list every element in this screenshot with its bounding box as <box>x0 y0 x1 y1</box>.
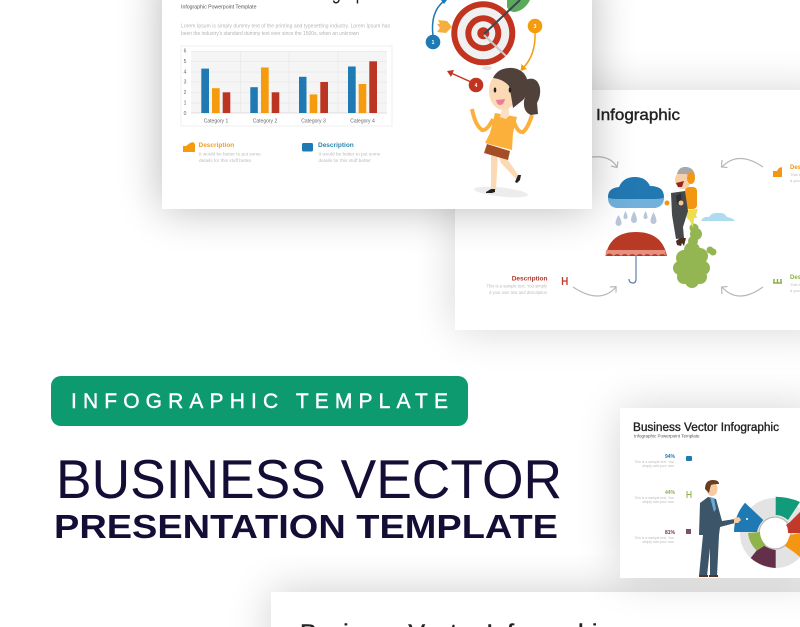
description: orange: It would be better to put some <box>199 152 261 156</box>
icon: green tool <box>687 491 691 498</box>
intro text <box>181 24 390 37</box>
stat row: 81%: 81% <box>665 530 676 536</box>
bar chart: Category 3 <box>301 118 326 124</box>
bar chart: 4 <box>184 70 187 76</box>
panel: bottom slide <box>271 592 800 627</box>
panel: umbrella slide <box>455 90 800 330</box>
bar chart: Category 1 <box>204 118 228 124</box>
curved arrows <box>573 157 763 296</box>
callout: green description <box>773 275 800 293</box>
illustration: jetpack man <box>664 167 698 246</box>
stat row: 94%: 94% <box>665 454 676 460</box>
step 1 marker: 1 <box>432 40 435 46</box>
description: blue: details for this stuff better. <box>318 158 372 163</box>
bar chart <box>181 46 392 126</box>
umbrella slide title: Infographic <box>596 107 680 124</box>
stat row: 81%: This is a sample text. You <box>634 536 674 540</box>
description: blue: It would be better to put some <box>318 152 381 156</box>
donut chart <box>734 497 800 568</box>
callout: red description: d your own text and description <box>489 290 548 295</box>
stat row: 94% <box>634 454 676 468</box>
stat row: 81%: simply add your own <box>642 540 674 544</box>
stat row: 94%: simply add your own <box>642 464 674 468</box>
badge: infographic template: INFOGRAPHIC TEMPLATE <box>71 390 448 413</box>
illustration: small light cloud <box>701 213 735 221</box>
donut slide subtitle: Infographic Powerpoint Template <box>634 434 700 438</box>
bar chart: Category 4 <box>350 118 375 124</box>
description: orange: Description <box>198 142 234 149</box>
badge: infographic template <box>51 376 468 426</box>
icon: briefcase <box>686 456 692 461</box>
step 3 marker <box>520 19 542 71</box>
stat row: 44% <box>634 490 676 504</box>
main title: BUSINESS VECTOR <box>56 448 562 510</box>
step 3 marker: 3 <box>534 24 537 30</box>
icon: cloud with rain <box>608 177 664 226</box>
stat row: 44%: 44% <box>665 490 676 496</box>
intro text: been the industry's standard dummy text ever since the 1500s, when an unknown <box>181 31 359 37</box>
description: orange: details for this stuff better. <box>199 158 252 163</box>
bar chart: 5 <box>184 59 187 65</box>
stat row: 44%: This is a sample text. You <box>634 496 674 500</box>
callout: red description: This is a sample text. You simply <box>486 284 548 288</box>
bar chart: 3 <box>184 80 187 86</box>
icon: target with arrow <box>437 0 530 70</box>
step 1 marker <box>426 0 447 49</box>
bar chart: 0 <box>184 111 187 117</box>
illustration: woman <box>472 68 540 199</box>
step 4 marker: 4 <box>475 83 478 89</box>
chart slide subtitle: Infographic Powerpoint Template <box>181 4 257 10</box>
donut slide title: Business Vector Infographic <box>633 422 779 434</box>
intro text: Lorem Ipsum is simply dummy text of the printing and typesetting industry. Lorem Ipsum has <box>181 24 390 30</box>
step 4 marker <box>447 70 483 92</box>
panel: chart slide <box>162 0 592 209</box>
stat row: 81% <box>634 530 676 544</box>
callout: red description: Description <box>512 276 548 282</box>
icon: umbrella <box>606 232 667 283</box>
bar chart: Category 2 <box>253 118 277 124</box>
callout: orange description <box>773 165 800 183</box>
bar chart: 2 <box>184 90 187 96</box>
icon: purple chart <box>686 529 691 534</box>
bar chart: 1 <box>184 100 187 106</box>
main subtitle: PRESENTATION TEMPLATE <box>54 508 558 545</box>
bar chart: 6 <box>184 48 187 54</box>
stat row: 94%: This is a sample text. You <box>634 460 674 464</box>
panel: donut slide <box>620 408 800 578</box>
businessman <box>699 480 741 577</box>
description: orange <box>183 142 261 163</box>
callout: red description <box>486 276 567 295</box>
stat row: 44%: simply add your own <box>642 500 674 504</box>
illustration: green smoke <box>673 224 716 288</box>
description: blue <box>302 142 381 163</box>
description: blue: Description <box>318 142 354 149</box>
